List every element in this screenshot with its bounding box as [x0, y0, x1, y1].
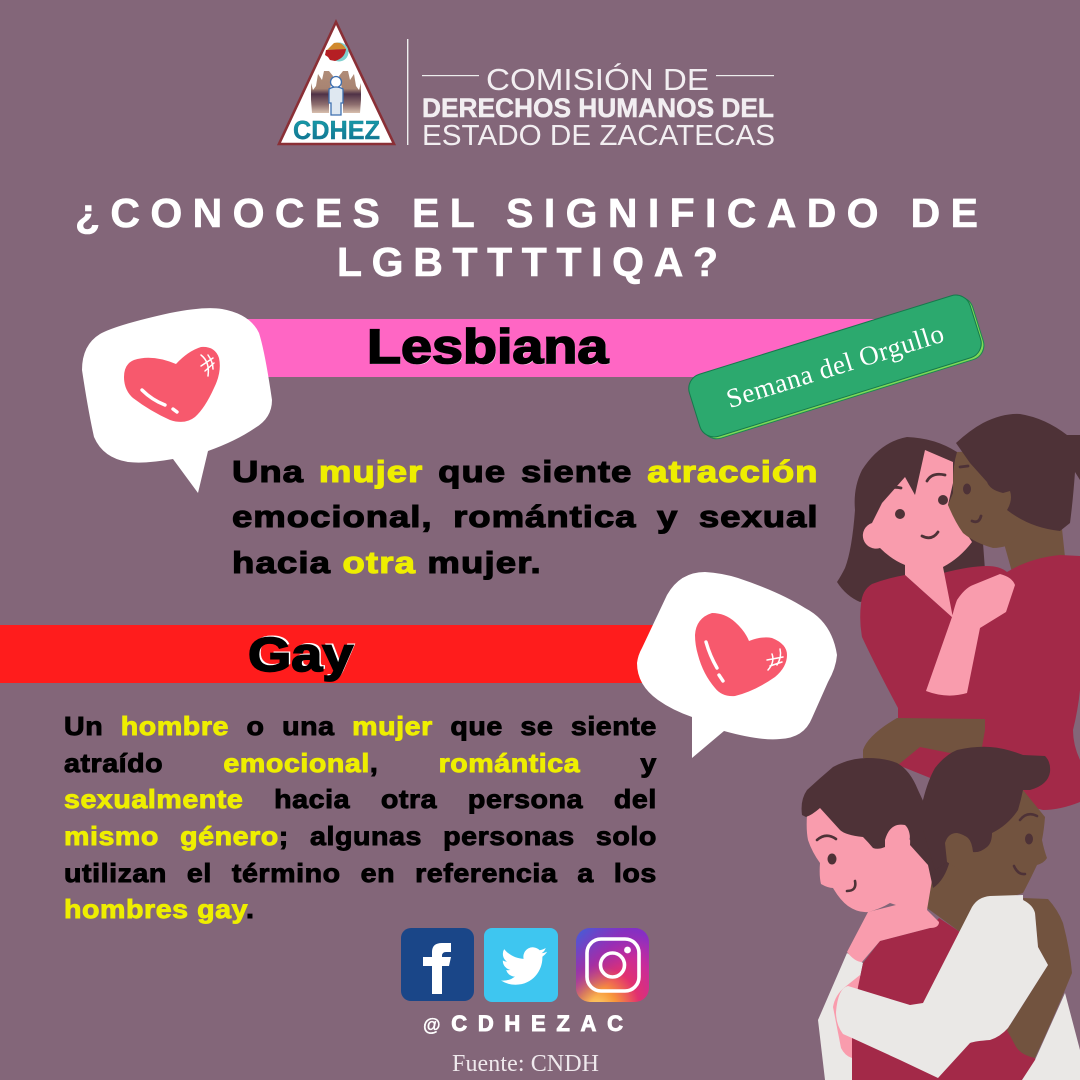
text block: definition Gay: otra — [381, 784, 437, 814]
white shirt left — [818, 953, 863, 1080]
title — [75, 190, 978, 285]
text block: definition Gay: referencia — [415, 858, 557, 888]
icon: facebook — [401, 928, 474, 1001]
text block: definition Gay: género; — [180, 821, 289, 851]
text block: definition Gay: en — [361, 858, 395, 888]
vertical divider and institution name: DERECHOS HUMANOS DEL — [422, 93, 774, 123]
text block: definition Gay: a — [577, 858, 594, 888]
pink head, neck and hand — [807, 800, 939, 962]
text block: definition Gay: los — [614, 858, 657, 888]
red shirt — [855, 918, 960, 1025]
text block: definition Gay: hacia — [274, 784, 350, 814]
pink arm — [833, 975, 860, 1060]
text block: definition Gay: romántica — [439, 748, 580, 778]
text block: definition Gay: siente — [571, 711, 657, 741]
heading: Gay: Gay — [248, 629, 353, 682]
text block: definition Gay: sexualmente — [64, 784, 243, 814]
text block: definition Gay: y — [640, 748, 657, 778]
text block: definition Lesbiana — [232, 454, 818, 580]
brown head and neck — [927, 790, 1047, 932]
text block: definition Gay: el — [187, 858, 212, 888]
text block: definition Lesbiana: emocional, — [232, 499, 433, 534]
text block: definition Lesbiana: que — [438, 454, 506, 489]
badge: Semana del Orgullo — [688, 294, 984, 440]
text block: definition Gay: que — [450, 711, 503, 741]
logo: CDHEZ — [277, 19, 775, 150]
badge: Semana del Orgullo: Semana del Orgullo — [723, 318, 947, 414]
text block: definition Gay: personas — [443, 821, 575, 851]
text block: definition Gay: hombres gay. — [64, 894, 254, 924]
heading: Lesbiana: Lesbiana — [367, 321, 608, 374]
text block: definition Lesbiana: siente — [521, 454, 632, 489]
social handle: @ CDHEZAC — [423, 1011, 623, 1036]
brown man's hair — [923, 747, 1050, 870]
pink bar: Lesbiana — [240, 319, 880, 377]
text block: definition Gay: se — [520, 711, 553, 741]
text block: definition Lesbiana: sexual — [699, 499, 818, 534]
triangle emblem: CDHEZ — [293, 115, 380, 145]
text block: definition Gay — [64, 711, 657, 924]
text block: definition Lesbiana: Una — [232, 454, 304, 489]
text block: definition Gay: mismo — [64, 821, 159, 851]
title: LGBTTTTIQA? — [337, 239, 718, 285]
text block: definition Lesbiana: y — [657, 499, 678, 534]
speech bubble with heart: Lesbiana — [82, 308, 272, 493]
pink man's hair — [802, 758, 950, 888]
title: ¿CONOCES EL SIGNIFICADO DE — [75, 190, 978, 236]
text block: definition Gay: solo — [596, 821, 657, 851]
illustration: two women embracing — [837, 414, 1080, 810]
text block: definition Gay: término — [232, 858, 341, 888]
text block: definition Gay: emocional, — [223, 748, 378, 778]
text block: definition Gay: hombre — [121, 711, 229, 741]
text block: definition Gay: o — [247, 711, 265, 741]
faces — [828, 854, 836, 864]
triangle emblem — [279, 22, 394, 145]
icon: twitter — [484, 928, 558, 1002]
vertical divider and institution name: COMISIÓN DE — [486, 62, 709, 97]
text block: definition Lesbiana: mujer — [319, 454, 423, 489]
illustration: two men embracing — [802, 718, 1080, 1080]
source note: Fuente: CNDH — [452, 1051, 599, 1077]
red bar: Gay — [0, 625, 660, 683]
text block: definition Gay: persona — [468, 784, 583, 814]
text block: definition Gay: atraído — [64, 748, 163, 778]
text block: definition Lesbiana: atracción — [647, 454, 818, 489]
text block: definition Gay: algunas — [310, 821, 422, 851]
brown arm — [1007, 898, 1072, 1058]
arm on red dress — [863, 718, 985, 765]
text block: definition Gay: una — [282, 711, 335, 741]
text block: definition Lesbiana: romántica — [453, 499, 636, 534]
icon: instagram — [576, 928, 649, 1002]
brown man's ear — [945, 833, 973, 870]
text block: definition Gay: utilizan — [64, 858, 167, 888]
white shirt lower right — [1022, 993, 1080, 1080]
white hugging arm — [836, 895, 1048, 1078]
text block: definition Gay: mujer — [352, 711, 433, 741]
speech bubble with heart: Gay — [637, 572, 837, 758]
text block: definition Gay: Un — [64, 711, 103, 741]
text block: definition Lesbiana: hacia otra mujer. — [232, 545, 542, 580]
text block: definition Gay: del — [614, 784, 657, 814]
vertical divider and institution name — [407, 39, 775, 152]
